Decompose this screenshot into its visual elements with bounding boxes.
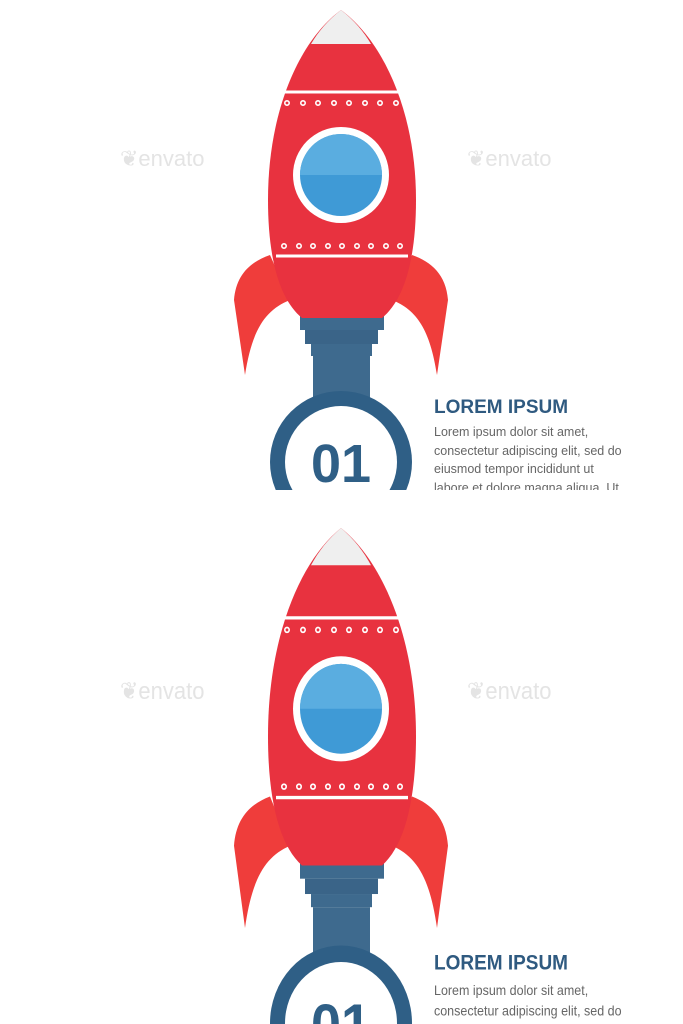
panel: top rocket infographic (120, 10, 622, 533)
panel: bottom rocket infographic (120, 528, 622, 1024)
